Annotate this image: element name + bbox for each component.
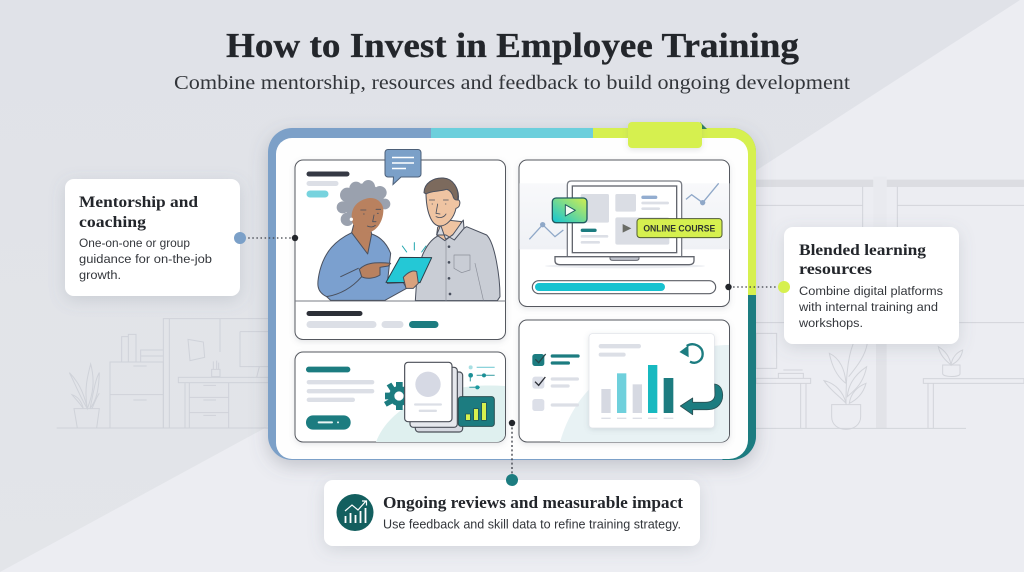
connector: blended learning [725,284,784,290]
progress bar [532,281,716,294]
placeholder text lines [306,172,438,328]
button [306,415,351,430]
callout body: growth. [79,268,121,282]
callout body: Use feedback and skill data to refine training strategy. [383,518,681,532]
panel: reviews chart [519,320,730,442]
callout body: with internal training and [798,300,938,314]
icon: refresh arrow [680,344,703,363]
background office line art: right [756,177,1024,429]
callout body: guidance for on-the-job [79,252,212,266]
bar chart card [589,334,714,428]
panel: online course [519,160,730,306]
icon: gear [384,382,413,410]
icon: growth chart circle [336,494,374,531]
callout body: Combine digital platforms [799,284,943,298]
callout body: workshops. [798,316,863,330]
callout: ongoing reviews and measurable impact [324,480,700,546]
icon: reviews dot [506,474,518,486]
callout heading: coaching [79,214,146,231]
callout: blended learning resources [784,227,959,344]
title: How to Invest in Employee Training [226,26,800,65]
panel: profile resources [295,352,506,442]
online course tag: ONLINE COURSE [643,224,715,234]
background office line art: left [57,319,268,428]
icon: mentorship dot [234,232,246,244]
icon: document stack [405,362,463,432]
sliders [468,365,495,389]
icon: play button [552,198,587,223]
connector: mentorship [240,235,298,241]
callout body: One-on-one or group [79,236,190,250]
callout heading: resources [799,261,872,278]
icon: return arrow [680,384,723,415]
online course tag [637,219,722,238]
icon: speech bubble [385,150,421,184]
callout heading: Mentorship and [79,194,198,211]
laptop [555,181,694,265]
lime tab [628,122,707,148]
illustration: two people with tablet [318,178,500,301]
callout: mentorship and coaching [65,179,240,296]
subtitle: Combine mentorship, resources and feedback to build ongoing development [174,72,850,94]
callout heading: Ongoing reviews and measurable impact [383,493,683,512]
callout heading: Blended learning [799,242,926,259]
connector: ongoing reviews [509,420,515,480]
panel: mentorship illustration [295,150,506,340]
checklist [532,354,580,411]
trend lines [529,183,719,239]
main frame [268,128,756,460]
icon: mini bar chart [458,397,494,426]
icon: blended learning dot [778,281,790,293]
